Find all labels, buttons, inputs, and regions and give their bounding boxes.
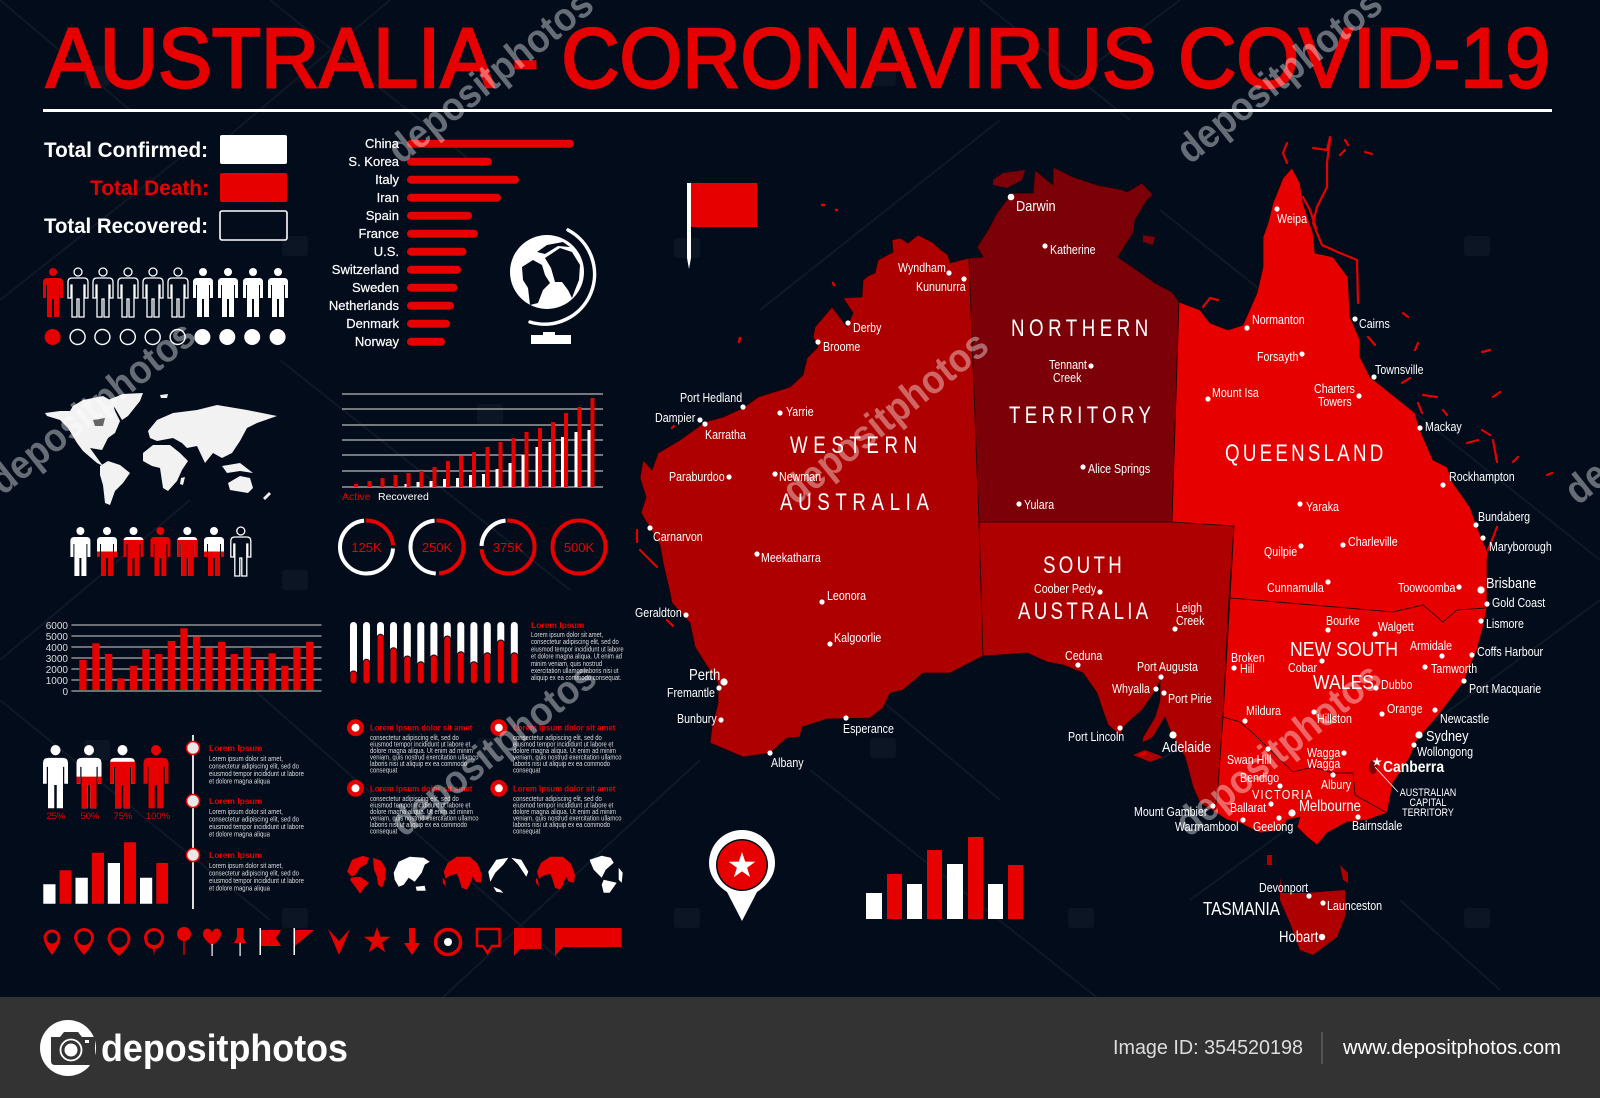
city: Walgett: Walgett — [1378, 619, 1414, 634]
timeline: consectetur adipiscing elit, sed do — [209, 870, 299, 878]
timeline: Lorem ipsum dolor sit amet, — [209, 808, 283, 816]
bar chart 0-6000 — [46, 621, 322, 698]
four bullet text blocks: Lorem Ipsum dolor sit amet — [370, 723, 473, 733]
city: Wagga Wagga — [1307, 745, 1347, 771]
title: AUSTRALIA - CORONAVIRUS COVID-19 — [46, 11, 1550, 105]
bar chart 0-6000: 6000 — [46, 621, 68, 632]
city: Yarrie: Yarrie — [786, 404, 814, 419]
city: Leigh Creek — [1172, 600, 1204, 632]
city: Tamworth: Tamworth — [1431, 661, 1477, 676]
text block: thermometer note: consectetur adipiscing elit, sed do — [531, 639, 619, 646]
footer bar: depositphotos — [101, 1028, 348, 1070]
city: Maryborough: Maryborough — [1489, 539, 1552, 554]
city: Katherine: Katherine — [1050, 242, 1096, 257]
four bullet text blocks: veniam, quis nostrud exercitation ullamco — [370, 754, 479, 762]
city: Ceduna: Ceduna — [1065, 648, 1103, 663]
large bar chart — [866, 837, 1023, 919]
bar chart 0-6000: 3000 — [46, 654, 68, 665]
timeline: et dolore magna aliqua — [209, 778, 270, 786]
country bar chart: France — [359, 226, 399, 241]
city: Bundaberg: Bundaberg — [1478, 509, 1530, 524]
city: Port Hedland: Port Hedland — [680, 390, 742, 405]
world map — [45, 393, 277, 505]
four bullet text blocks: Lorem Ipsum dolor sit amet — [513, 723, 616, 733]
city labels — [635, 194, 1552, 946]
donut gauges: 500K — [564, 540, 595, 555]
country bar chart: U.S. — [374, 244, 399, 259]
city: Broken Hill: Hill — [1240, 661, 1255, 676]
four bullet text blocks: consequat — [513, 767, 540, 775]
timeline: Lorem Ipsum — [209, 796, 263, 806]
city: Leigh Creek: Creek — [1176, 613, 1204, 628]
four bullet text blocks: consectetur adipiscing elit, sed do — [370, 734, 459, 742]
city: Mildura: Mildura — [1246, 703, 1281, 718]
city: Tennant Creek: Creek — [1053, 370, 1081, 385]
city: Charters Towers: Charters — [1314, 381, 1355, 396]
city: Charters Towers: Towers — [1318, 394, 1352, 409]
city: Sydney: Sydney — [1426, 727, 1469, 744]
city: Kalgoorlie: Kalgoorlie — [834, 630, 882, 645]
text block: thermometer note: exercitation ullamco laboris nisi ut — [531, 667, 618, 675]
bar chart 0-6000: 0 — [62, 687, 68, 698]
city: Paraburdoo: Paraburdoo — [669, 469, 725, 484]
timeline: Lorem ipsum dolor sit amet, — [209, 862, 283, 870]
globes row — [347, 856, 623, 894]
state: Western Australia — [640, 235, 983, 757]
country bar chart: Norway — [355, 334, 399, 349]
text block: thermometer note: eiusmod tempor incididunt ut labore — [531, 646, 624, 654]
country bar chart: Netherlands — [329, 298, 399, 313]
city: Coober Pedy: Coober Pedy — [1034, 581, 1096, 596]
city: Port Augusta: Port Augusta — [1137, 659, 1198, 674]
donut gauges — [340, 520, 606, 574]
city: Port Lincoln: Port Lincoln — [1068, 729, 1124, 744]
city: Esperance: Esperance — [843, 721, 894, 736]
state names: NEW SOUTH — [1290, 639, 1398, 661]
reef and islands — [637, 137, 1552, 755]
watermarks: depositphotos — [1167, 654, 1390, 845]
ACT callout: AUSTRALIAN — [1400, 787, 1456, 799]
state names: NORTHERN — [1011, 315, 1148, 342]
city: Canberra: Canberra — [1383, 758, 1445, 776]
city: Dubbo: Dubbo — [1381, 677, 1413, 692]
four bullet text blocks: laboris nisi ut aliquip ex ea commodo — [513, 821, 610, 829]
legend: Total Confirmed: — [44, 139, 208, 162]
city: Karratha: Karratha — [705, 427, 746, 442]
state: Queensland — [1172, 168, 1488, 622]
four bullet text blocks: veniam, quis nostrud exercitation ullamco — [513, 815, 622, 823]
country bar chart: Iran — [377, 190, 399, 205]
four bullet text blocks: consectetur adipiscing elit, sed do — [513, 734, 602, 742]
four bullet text blocks: eiusmod tempor incididunt ut labore et — [370, 741, 470, 749]
four bullet text blocks: veniam, quis nostrud exercitation ullamco — [513, 754, 622, 762]
city: Wollongong: Wollongong — [1417, 744, 1473, 759]
country bar chart: Spain — [366, 208, 399, 223]
city: Leonora: Leonora — [827, 588, 866, 603]
timeline: consectetur adipiscing elit, sed do — [209, 816, 299, 824]
city: Port Pirie: Port Pirie — [1168, 691, 1212, 706]
timeline — [186, 735, 304, 909]
Groote Eylandt — [1143, 235, 1155, 245]
icon: desk globe — [510, 230, 595, 344]
bar chart 0-6000: 5000 — [46, 632, 68, 643]
timeline: eiusmod tempor incididunt ut labore — [209, 877, 304, 885]
city: Tennant Creek: Tennant — [1049, 357, 1088, 372]
city: Normanton: Normanton — [1252, 312, 1305, 327]
city: Mackay: Mackay — [1425, 419, 1462, 434]
city: Gold Coast: Gold Coast — [1492, 595, 1546, 610]
icon: map pin with star — [709, 830, 775, 921]
city: Alice Springs: Alice Springs — [1088, 461, 1150, 476]
city: Devonport: Devonport — [1259, 880, 1309, 895]
city: Newcastle: Newcastle — [1440, 711, 1489, 726]
state names: QUEENSLAND — [1225, 440, 1383, 467]
watermarks: depositphotos — [382, 654, 605, 845]
city: Darwin — [1008, 194, 1056, 214]
city: Newcastle — [1432, 707, 1489, 726]
footer bar: www.depositphotos.com — [1342, 1037, 1561, 1059]
watermarks: depositphotos — [774, 322, 997, 513]
people row percentage — [70, 527, 251, 576]
legend — [44, 135, 287, 240]
text block: thermometer note: et dolore magna aliqua. Ut enim ad — [531, 653, 622, 661]
four bullet text blocks: Lorem Ipsum dolor sit amet — [513, 784, 616, 794]
four bullet text blocks: Lorem Ipsum dolor sit amet — [370, 784, 473, 794]
city: Hillston: Hillston — [1317, 711, 1352, 726]
city: Bendigo: Bendigo — [1240, 770, 1279, 785]
four people percentages: 75% — [113, 811, 133, 822]
state: Northern Territory — [969, 167, 1179, 522]
ACT callout: TERRITORY — [1402, 807, 1454, 819]
country bar chart: Denmark — [346, 316, 399, 331]
ACT callout — [1375, 767, 1456, 819]
city: Warrnambool: Warrnambool — [1175, 819, 1239, 834]
city: Wagga Wagga: Wagga — [1307, 745, 1341, 760]
city: Orange: Orange — [1387, 701, 1423, 716]
four people percentages: 50% — [80, 811, 100, 822]
city: Brisbane: Brisbane — [1486, 574, 1537, 591]
city: Albury: Albury — [1321, 777, 1351, 792]
city: Launceston: Launceston — [1327, 898, 1382, 913]
city: Adelaide: Adelaide — [1162, 738, 1211, 755]
timeline: eiusmod tempor incididunt ut labore — [209, 770, 304, 778]
four people percentages: 25% — [46, 811, 66, 822]
bar chart 0-6000: 2000 — [46, 665, 68, 676]
city: Geelong: Geelong — [1253, 819, 1293, 834]
timeline: Lorem ipsum dolor sit amet, — [209, 755, 283, 763]
country bar chart: Sweden — [352, 280, 399, 295]
bar chart 0-6000: 4000 — [46, 643, 68, 654]
thermometer bars — [350, 622, 518, 684]
city: Charters Towers — [1314, 381, 1362, 409]
country bar chart: S. Korea — [348, 154, 400, 169]
legend: Total Recovered: — [44, 215, 208, 238]
city: Bourke: Bourke — [1326, 613, 1360, 628]
city: Coffs Harbour: Coffs Harbour — [1477, 644, 1543, 659]
city: Cobar: Cobar — [1288, 660, 1317, 675]
city: Forsayth: Forsayth — [1257, 349, 1298, 364]
city: Dampier: Dampier — [655, 410, 695, 425]
watermarks — [0, 0, 1600, 845]
four bullet text blocks: dolore magna aliqua. Ut enim ad minim — [513, 808, 616, 816]
four people percentages: 100% — [146, 811, 171, 822]
city: Meekatharra: Meekatharra — [761, 550, 821, 565]
city: Yulara: Yulara — [1024, 497, 1055, 512]
state names: WALES — [1313, 672, 1374, 694]
map of Australia — [640, 167, 1488, 955]
four bullet text blocks: consequat — [370, 828, 397, 836]
donut gauges: 125K — [351, 540, 382, 555]
city: Broome: Broome — [823, 339, 861, 354]
four people percentages — [43, 745, 171, 822]
title rule — [43, 109, 1552, 112]
timeline: et dolore magna aliqua — [209, 885, 270, 893]
bar chart 0-6000: 1000 — [46, 676, 68, 687]
state names: WESTERN — [790, 432, 917, 459]
city: Whyalla: Whyalla — [1112, 681, 1150, 696]
text block: thermometer note: Lorem ipsum dolor sit amet, — [531, 631, 603, 639]
footer bar: Image ID: 354520198 — [1113, 1037, 1303, 1059]
NSW and Victoria border — [1223, 717, 1387, 813]
city: Albany: Albany — [771, 755, 804, 770]
city: Darwin: Darwin — [1016, 197, 1056, 214]
city: Albany — [767, 750, 804, 770]
city: Newman: Newman — [779, 469, 821, 484]
state names — [780, 315, 1398, 919]
icons row — [44, 927, 622, 956]
city: Mount Gambier: Mount Gambier — [1134, 804, 1207, 819]
city: Broken Hill — [1231, 650, 1265, 676]
footer bar — [0, 997, 1600, 1098]
city: Geraldton: Geraldton — [635, 605, 682, 620]
city: Wyndham: Wyndham — [898, 260, 946, 275]
four bullet text blocks: veniam, quis nostrud exercitation ullamco — [370, 815, 479, 823]
state: New South Wales and Victoria — [1215, 598, 1487, 845]
donut gauges: 375K — [493, 540, 524, 555]
ACT — [1369, 760, 1377, 774]
city: Derby: Derby — [853, 320, 881, 335]
city: Karratha — [702, 421, 746, 442]
active vs recovered chart: Recovered — [378, 491, 429, 503]
four bullet text blocks: eiusmod tempor incididunt ut labore et — [513, 802, 613, 810]
city: Bunbury: Bunbury — [677, 711, 717, 726]
city: Leigh Creek: Leigh — [1176, 600, 1202, 615]
state: South Australia — [979, 522, 1234, 812]
people row with dots — [43, 268, 288, 345]
legend: Total Death: — [90, 177, 209, 200]
four bullet text blocks — [347, 719, 622, 836]
country bar chart — [329, 136, 574, 349]
city: Charleville: Charleville — [1348, 534, 1398, 549]
city: Melbourne: Melbourne — [1299, 798, 1361, 815]
country bar chart: China — [365, 136, 400, 151]
city: Tennant Creek — [1049, 357, 1094, 385]
city: Port Macquarie: Port Macquarie — [1469, 681, 1542, 696]
state names: AUSTRALIA — [1018, 598, 1149, 625]
city: Swan Hill: Swan Hill — [1227, 752, 1271, 767]
timeline: Lorem Ipsum — [209, 850, 263, 860]
timeline: et dolore magna aliqua — [209, 831, 270, 839]
state names: VICTORIA — [1252, 787, 1313, 802]
city: Kununurra: Kununurra — [916, 279, 966, 294]
timeline: eiusmod tempor incididunt ut labore — [209, 823, 304, 831]
city: Bairnsdale: Bairnsdale — [1352, 818, 1403, 833]
small bar chart — [43, 842, 168, 904]
four bullet text blocks: consequat — [370, 767, 397, 775]
icon: logo camera — [40, 1020, 96, 1076]
city: Mount Isa: Mount Isa — [1212, 385, 1259, 400]
four bullet text blocks: dolore magna aliqua. Ut enim ad minim — [370, 808, 473, 816]
four bullet text blocks: eiusmod tempor incididunt ut labore et — [370, 802, 470, 810]
state names: TERRITORY — [1009, 402, 1151, 429]
city: Perth: Perth — [689, 667, 720, 684]
four bullet text blocks: laboris nisi ut aliquip ex ea commodo — [370, 821, 467, 829]
active vs recovered chart: Active — [342, 491, 371, 503]
four bullet text blocks: dolore magna aliqua. Ut enim ad minim — [370, 747, 473, 755]
four bullet text blocks: consectetur adipiscing elit, sed do — [370, 795, 459, 803]
Melville Island — [993, 170, 1025, 188]
Kangaroo Island — [1133, 750, 1163, 762]
city: Weipa: Weipa — [1277, 211, 1307, 226]
city: Armidale: Armidale — [1410, 638, 1452, 653]
text block: thermometer note: Lorem Ipsum — [531, 620, 585, 630]
city: Ballarat: Ballarat — [1230, 800, 1267, 815]
four bullet text blocks: laboris nisi ut aliquip ex ea commodo — [370, 760, 467, 768]
four bullet text blocks: eiusmod tempor incididunt ut labore et — [513, 741, 613, 749]
city: Broken Hill: Broken — [1231, 650, 1265, 665]
four bullet text blocks: dolore magna aliqua. Ut enim ad minim — [513, 747, 616, 755]
city: Quilpie: Quilpie — [1264, 544, 1298, 559]
state: Tasmania — [1267, 855, 1348, 955]
country bar chart: Switzerland — [332, 262, 399, 277]
country bar chart: Italy — [375, 172, 399, 187]
city: Carnarvon: Carnarvon — [653, 529, 703, 544]
four bullet text blocks: consequat — [513, 828, 540, 836]
timeline: consectetur adipiscing elit, sed do — [209, 763, 299, 771]
city: Fremantle: Fremantle — [667, 685, 715, 700]
text block: thermometer note — [531, 620, 624, 682]
text block: thermometer note: minim veniam, quis nostrud — [531, 660, 602, 668]
city: Wagga Wagga: Wagga — [1307, 756, 1341, 771]
state names: SOUTH — [1043, 552, 1122, 579]
city: Cunnamulla: Cunnamulla — [1267, 580, 1324, 595]
city: Townsville: Townsville — [1375, 362, 1424, 377]
city: Lismore: Lismore — [1486, 616, 1524, 631]
text block: thermometer note: aliquip ex ea commodo consequat. — [531, 675, 621, 682]
active vs recovered chart — [342, 394, 603, 503]
four bullet text blocks: consectetur adipiscing elit, sed do — [513, 795, 602, 803]
timeline: Lorem Ipsum — [209, 743, 263, 753]
four bullet text blocks: laboris nisi ut aliquip ex ea commodo — [513, 760, 610, 768]
city: Yaraka: Yaraka — [1306, 499, 1339, 514]
icon: red flag — [687, 183, 757, 269]
city: Toowoomba: Toowoomba — [1398, 580, 1456, 595]
city: Cairns: Cairns — [1359, 316, 1390, 331]
city: Mildura — [1242, 703, 1281, 724]
state names: TASMANIA — [1203, 899, 1280, 919]
donut gauges: 250K — [422, 540, 453, 555]
ACT callout: CAPITAL — [1410, 797, 1447, 809]
city: Rockhampton: Rockhampton — [1449, 469, 1515, 484]
city: Hobart: Hobart — [1279, 929, 1318, 946]
state names: AUSTRALIA — [780, 489, 930, 516]
